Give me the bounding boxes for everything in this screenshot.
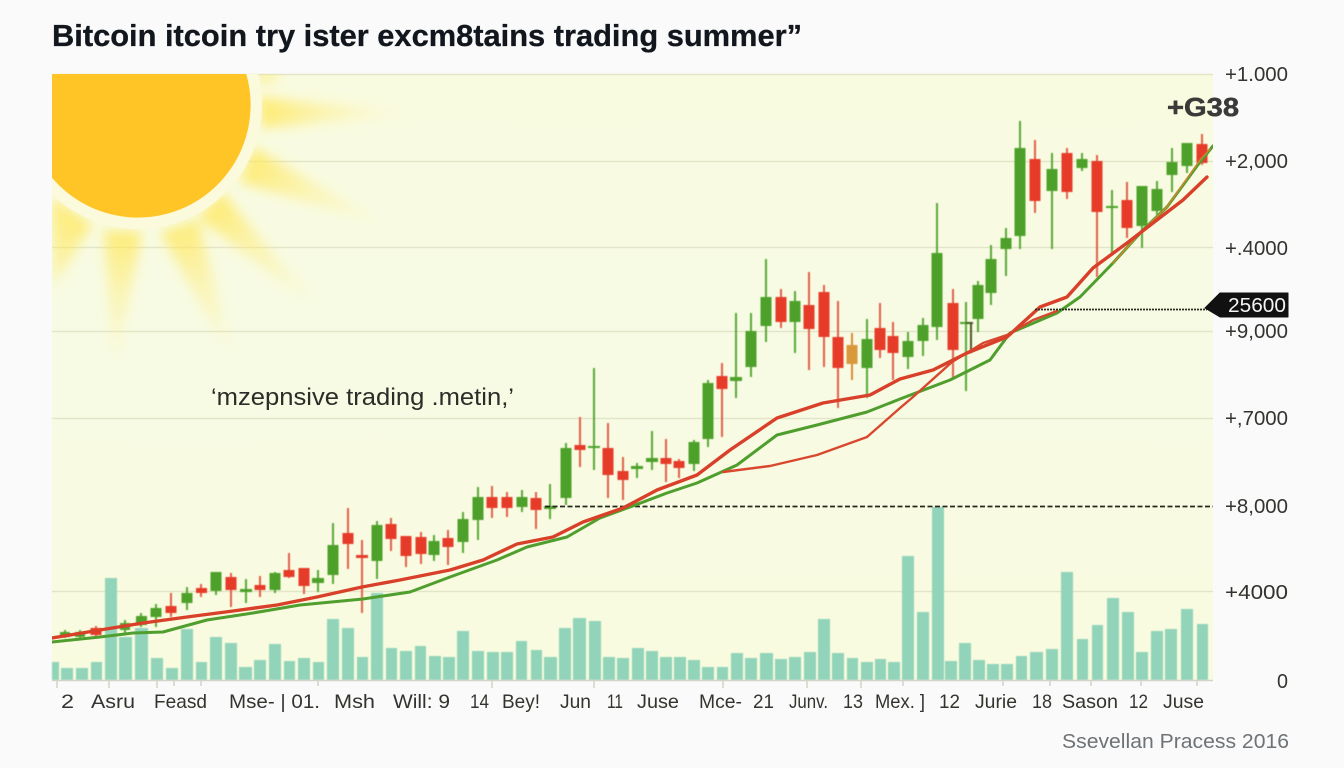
x axis labels: Mse- | 01. (229, 691, 320, 713)
dark stick candle (966, 323, 973, 353)
x axis baseline and ticks (52, 680, 1213, 688)
main red moving average (52, 177, 1207, 638)
y axis labels: 0 (1277, 670, 1288, 693)
x axis labels: 2 (61, 691, 74, 713)
x axis labels: Sason (1062, 691, 1118, 713)
sun disc (52, 74, 251, 218)
y axis labels: +1.000 (1225, 63, 1288, 86)
y axis labels: +,7000 (1225, 407, 1288, 430)
green candle wicks (65, 121, 1187, 638)
red candle wicks (96, 134, 1202, 637)
x axis labels: Mce- (699, 691, 742, 713)
x axis labels: Juse (637, 691, 679, 713)
lower red moving average (723, 311, 1057, 472)
dashed reference line (545, 506, 1213, 508)
sun rays (52, 74, 378, 347)
sun halo ring (55, 74, 262, 229)
panel: chart plot background (52, 74, 1213, 680)
price tag: 25600 (1205, 293, 1288, 317)
annotation text: ‘mzepnsive trading .metin,’ (211, 384, 514, 411)
title: Bitcoin itcoin try ister excm8tains trading summer” (52, 18, 802, 53)
x axis labels: Will: 9 (393, 691, 450, 713)
moving average lines (52, 146, 1213, 642)
x axis labels: Asru (91, 691, 135, 713)
x axis labels: Jurie (975, 691, 1017, 713)
gain callout: +G38 (1167, 92, 1239, 122)
horizontal grid lines (52, 74, 1213, 592)
x axis labels: 14 (470, 691, 489, 713)
red candle bodies (90, 144, 1208, 635)
x axis labels: Msh (334, 691, 375, 713)
x axis labels: Junv. (789, 691, 828, 713)
x axis labels: Jun (560, 691, 591, 713)
volume bars (52, 507, 1208, 680)
x axis labels: Bey! (502, 691, 540, 713)
x axis labels: Mex. ] (875, 691, 925, 713)
x axis labels: 18 (1032, 691, 1052, 713)
dotted price line (1035, 308, 1207, 310)
y axis labels: +.4000 (1225, 237, 1288, 260)
y axis labels: +2,000 (1225, 150, 1288, 173)
source footer: Ssevellan Pracess 2016 (1062, 730, 1289, 753)
x axis labels: 11 (607, 691, 623, 713)
y axis labels: +8,000 (1225, 495, 1288, 518)
y axis labels: +9,000 (1225, 320, 1288, 343)
x axis labels: 13 (843, 691, 863, 713)
x axis labels (61, 691, 1204, 713)
green candle bodies (60, 143, 1192, 637)
x axis labels: 21 (753, 691, 774, 713)
x axis labels: 12 (1129, 691, 1148, 713)
orange moving average (1113, 149, 1210, 263)
x axis labels: Feasd (154, 691, 207, 713)
orange doji candle (846, 333, 858, 380)
x axis labels: 12 (939, 691, 960, 713)
candlestick chart (60, 121, 1208, 638)
price tag: 25600: 25600 (1228, 295, 1286, 317)
y axis labels: +4000 (1225, 581, 1288, 604)
x axis labels: Juse (1163, 691, 1204, 713)
icon: sun with rays (52, 74, 378, 347)
y axis labels (1225, 63, 1288, 693)
green moving average (52, 146, 1213, 642)
